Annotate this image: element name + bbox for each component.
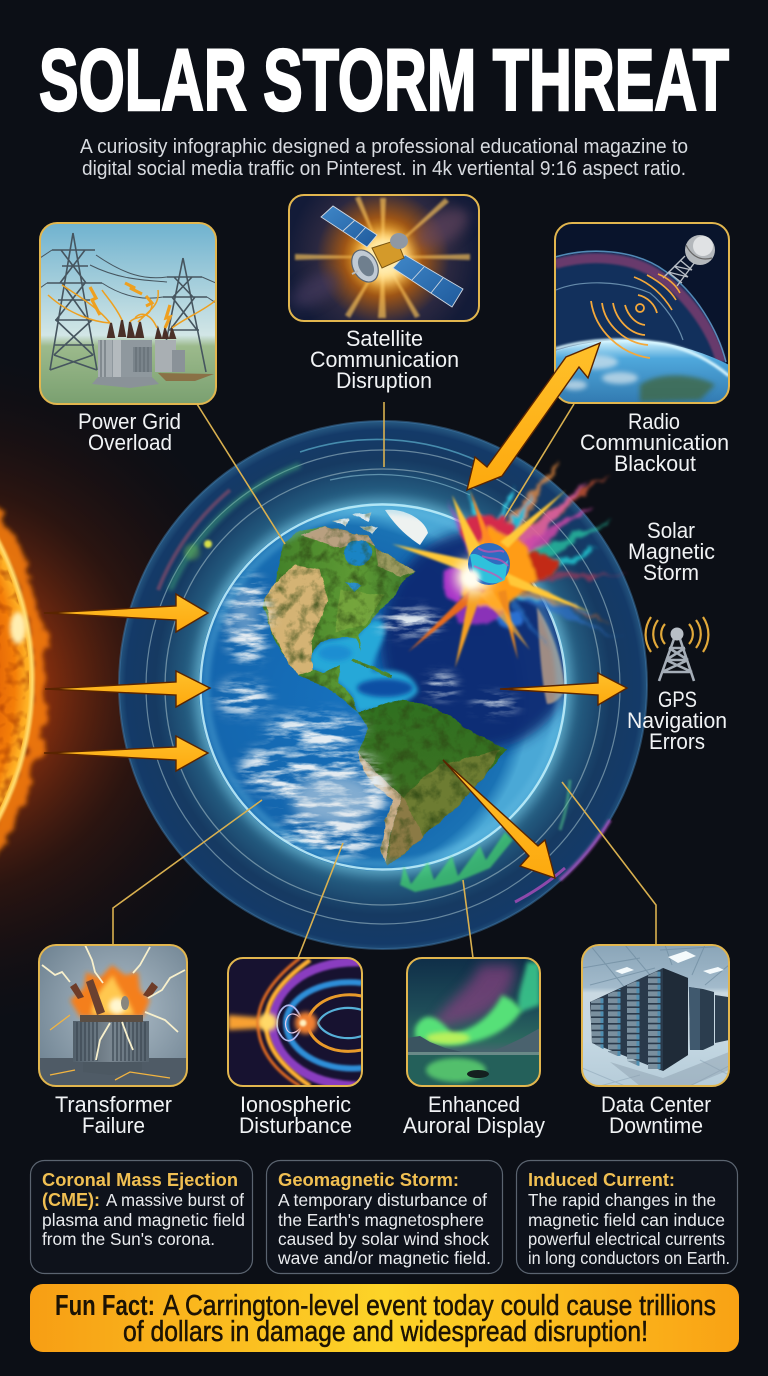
panel: geomagnetic storm: the Earth's magnetosphere	[278, 1210, 484, 1230]
panel: induced current: Induced Current:	[528, 1169, 675, 1190]
callout: fun fact	[30, 1284, 739, 1352]
label: data center downtime: Downtime	[609, 1113, 703, 1138]
panel: geomagnetic storm	[266, 1160, 502, 1274]
label: gps navigation errors: GPS	[658, 687, 697, 712]
panel: coronal mass ejection: plasma and magnetic field	[42, 1210, 245, 1230]
tower	[663, 256, 695, 286]
clouds	[217, 575, 517, 858]
card: radio	[554, 222, 730, 404]
label: solar magnetic storm	[628, 518, 715, 585]
mountains	[408, 1036, 461, 1052]
label: power grid overload	[78, 409, 181, 455]
card: power grid	[40, 223, 216, 404]
solar magnetic storm burst	[392, 460, 627, 668]
icon: gps tower	[646, 617, 708, 681]
connector lines	[113, 402, 656, 958]
card: data center	[582, 945, 729, 1086]
south america	[358, 700, 507, 866]
subtitle: digital social media traffic on Pinterest. in 4k vertiental 9:16 aspect ratio.	[82, 158, 686, 180]
panel: coronal mass ejection: from the Sun's corona.	[42, 1229, 215, 1249]
coastal shelves	[310, 620, 418, 712]
africa limb	[537, 607, 565, 704]
label: gps navigation errors: Navigation	[627, 708, 727, 733]
transformer body	[73, 1021, 149, 1062]
panel: induced current: magnetic field can induce	[528, 1210, 725, 1230]
label: ionospheric disturbance: Disturbance	[239, 1113, 352, 1138]
label: solar magnetic storm: Solar	[647, 518, 695, 543]
panel: coronal mass ejection	[30, 1160, 252, 1274]
label: satellite communication disruption	[310, 326, 459, 393]
label: solar magnetic storm: Magnetic	[628, 539, 715, 564]
panel: induced current	[516, 1160, 738, 1274]
subtitle: A curiosity infographic designed a professional educational magazine to	[80, 136, 688, 158]
solar panels	[321, 206, 377, 247]
magnetosphere rings	[119, 421, 647, 949]
north america	[263, 513, 415, 712]
subtitle	[80, 136, 688, 180]
label: satellite communication disruption: Satellite	[346, 326, 423, 351]
panel: coronal mass ejection: A massive burst of	[106, 1190, 244, 1210]
label: solar magnetic storm: Storm	[643, 560, 699, 585]
panel: geomagnetic storm: A temporary disturbance of	[278, 1190, 487, 1210]
lightning arcs	[48, 283, 216, 328]
double arrow: radio to storm	[467, 343, 600, 490]
earth	[195, 499, 580, 875]
server racks	[715, 995, 729, 1043]
label: ionospheric disturbance	[239, 1092, 352, 1138]
panel: geomagnetic storm: Geomagnetic Storm:	[278, 1169, 459, 1190]
label: transformer failure: Transformer	[55, 1092, 172, 1117]
sun glow	[0, 350, 280, 1030]
panel: induced current: The rapid changes in the	[528, 1190, 716, 1210]
outer feathers	[505, 470, 612, 552]
label: enhanced auroral display: Auroral Display	[403, 1113, 545, 1138]
storm core sphere	[468, 543, 510, 585]
label: power grid overload: Power Grid	[78, 409, 181, 434]
card: aurora	[407, 958, 540, 1086]
panel: coronal mass ejection: Coronal Mass Ejection	[42, 1169, 238, 1190]
atlantic dark ocean	[380, 530, 580, 750]
label: gps navigation errors: Errors	[649, 729, 705, 754]
label: enhanced auroral display	[403, 1092, 545, 1138]
label: data center downtime: Data Center	[601, 1092, 711, 1117]
card: satellite	[286, 195, 479, 321]
label: satellite communication disruption: Communication	[310, 347, 459, 372]
light rays	[295, 196, 470, 318]
label: transformer failure	[55, 1092, 172, 1138]
panel: geomagnetic storm: caused by solar wind shock	[278, 1229, 489, 1249]
label: ionospheric disturbance: Ionospheric	[240, 1092, 351, 1117]
lightning	[42, 945, 185, 1080]
panel: coronal mass ejection: (CME):	[42, 1189, 100, 1210]
arrow: sun to earth top	[44, 594, 208, 632]
arrow: sun to earth middle	[45, 671, 210, 707]
transformers	[112, 340, 152, 377]
fireball	[70, 965, 150, 1017]
transmission towers	[40, 233, 216, 372]
arrow: to lower right	[443, 760, 555, 878]
arrow: to gps	[500, 673, 627, 705]
label: gps navigation errors	[627, 687, 727, 754]
label: transformer failure: Failure	[82, 1113, 145, 1138]
radio waves	[591, 274, 680, 358]
label: power grid overload: Overload	[88, 430, 172, 455]
panel: geomagnetic storm: wave and/or magnetic field.	[277, 1248, 491, 1268]
label: radio communication blackout: Radio	[628, 409, 680, 434]
auroral band	[400, 832, 513, 892]
inner fire	[444, 515, 556, 629]
label: radio communication blackout: Blackout	[614, 451, 696, 476]
label: enhanced auroral display: Enhanced	[428, 1092, 520, 1117]
callout: fun fact: of dollars in damage and widespread disruption!	[123, 1316, 648, 1348]
callout: fun fact: Fun Fact:	[55, 1290, 155, 1322]
card: transformer	[39, 945, 187, 1086]
label: satellite communication disruption: Disruption	[336, 368, 432, 393]
label: radio communication blackout: Communication	[580, 430, 729, 455]
label: radio communication blackout	[580, 409, 729, 476]
card: ionospheric	[228, 958, 362, 1086]
label: data center downtime	[601, 1092, 711, 1138]
panel: induced current: in long conductors on Earth.	[528, 1248, 730, 1268]
body and dish	[372, 240, 404, 268]
greenland ice	[385, 510, 428, 545]
panel: induced current: powerful electrical currents	[528, 1229, 725, 1249]
arrow: sun to earth bottom	[44, 736, 208, 771]
sun	[0, 504, 53, 856]
